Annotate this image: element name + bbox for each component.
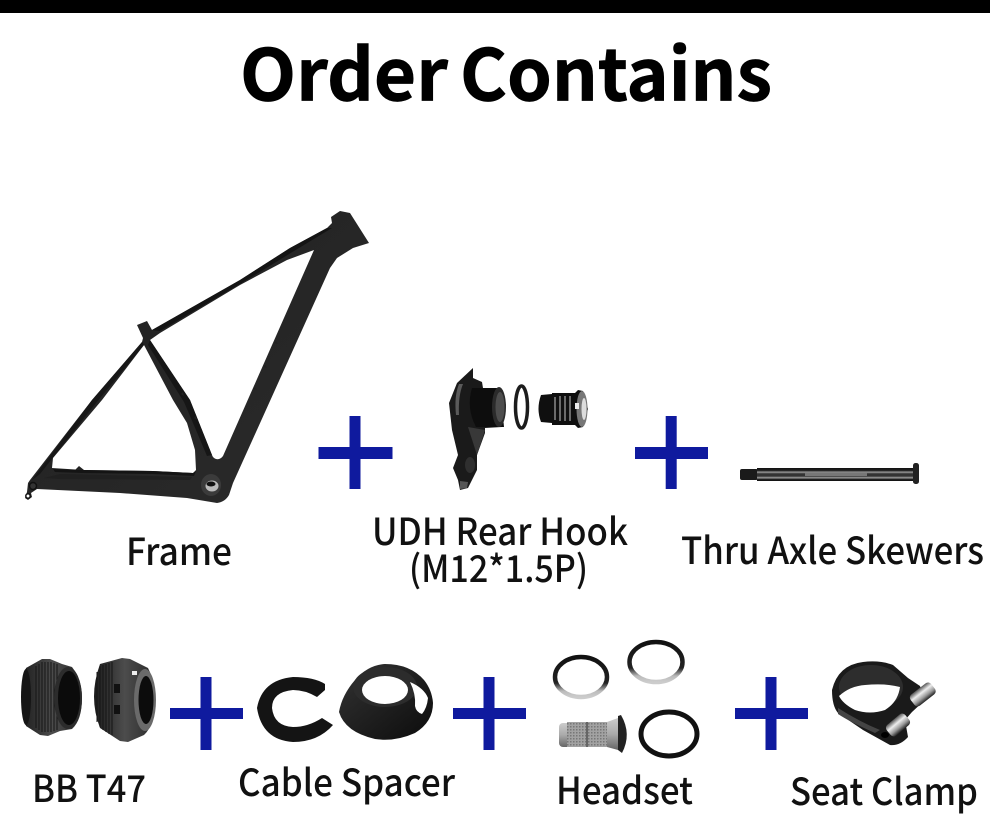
icon: cable spacer cone [339, 664, 433, 740]
title: Contains [460, 20, 772, 122]
icon: hook bolt [538, 390, 588, 428]
plus 4 [453, 677, 526, 750]
plus 1 [318, 416, 392, 489]
label: Seat Clamp: Seat Clamp [790, 762, 978, 816]
label: M12 spec: (M12*1.5P) [409, 539, 588, 593]
icon: thru axle skewer [740, 463, 919, 484]
icon: cable spacer C-ring [257, 664, 433, 742]
icon: bike frame [25, 211, 369, 503]
label: UDH Rear Hook: UDH Rear Hook [372, 502, 628, 556]
label: BB T47: BB T47 [32, 759, 146, 813]
title: Order [240, 20, 449, 122]
title [240, 20, 772, 122]
icon: headset parts [555, 642, 697, 756]
label: Headset: Headset [556, 761, 693, 815]
icon: o-ring [516, 386, 528, 428]
plus 2 [635, 416, 708, 489]
icon: BB T47 cups [21, 658, 156, 742]
plus 3 [170, 677, 243, 750]
icon: UDH rear hook [449, 368, 588, 490]
label: Frame: Frame [126, 522, 232, 576]
top bar [0, 0, 990, 13]
plus 5 [735, 677, 808, 750]
icon: seat clamp [832, 661, 937, 745]
label: Cable Spacer: Cable Spacer [238, 753, 456, 807]
